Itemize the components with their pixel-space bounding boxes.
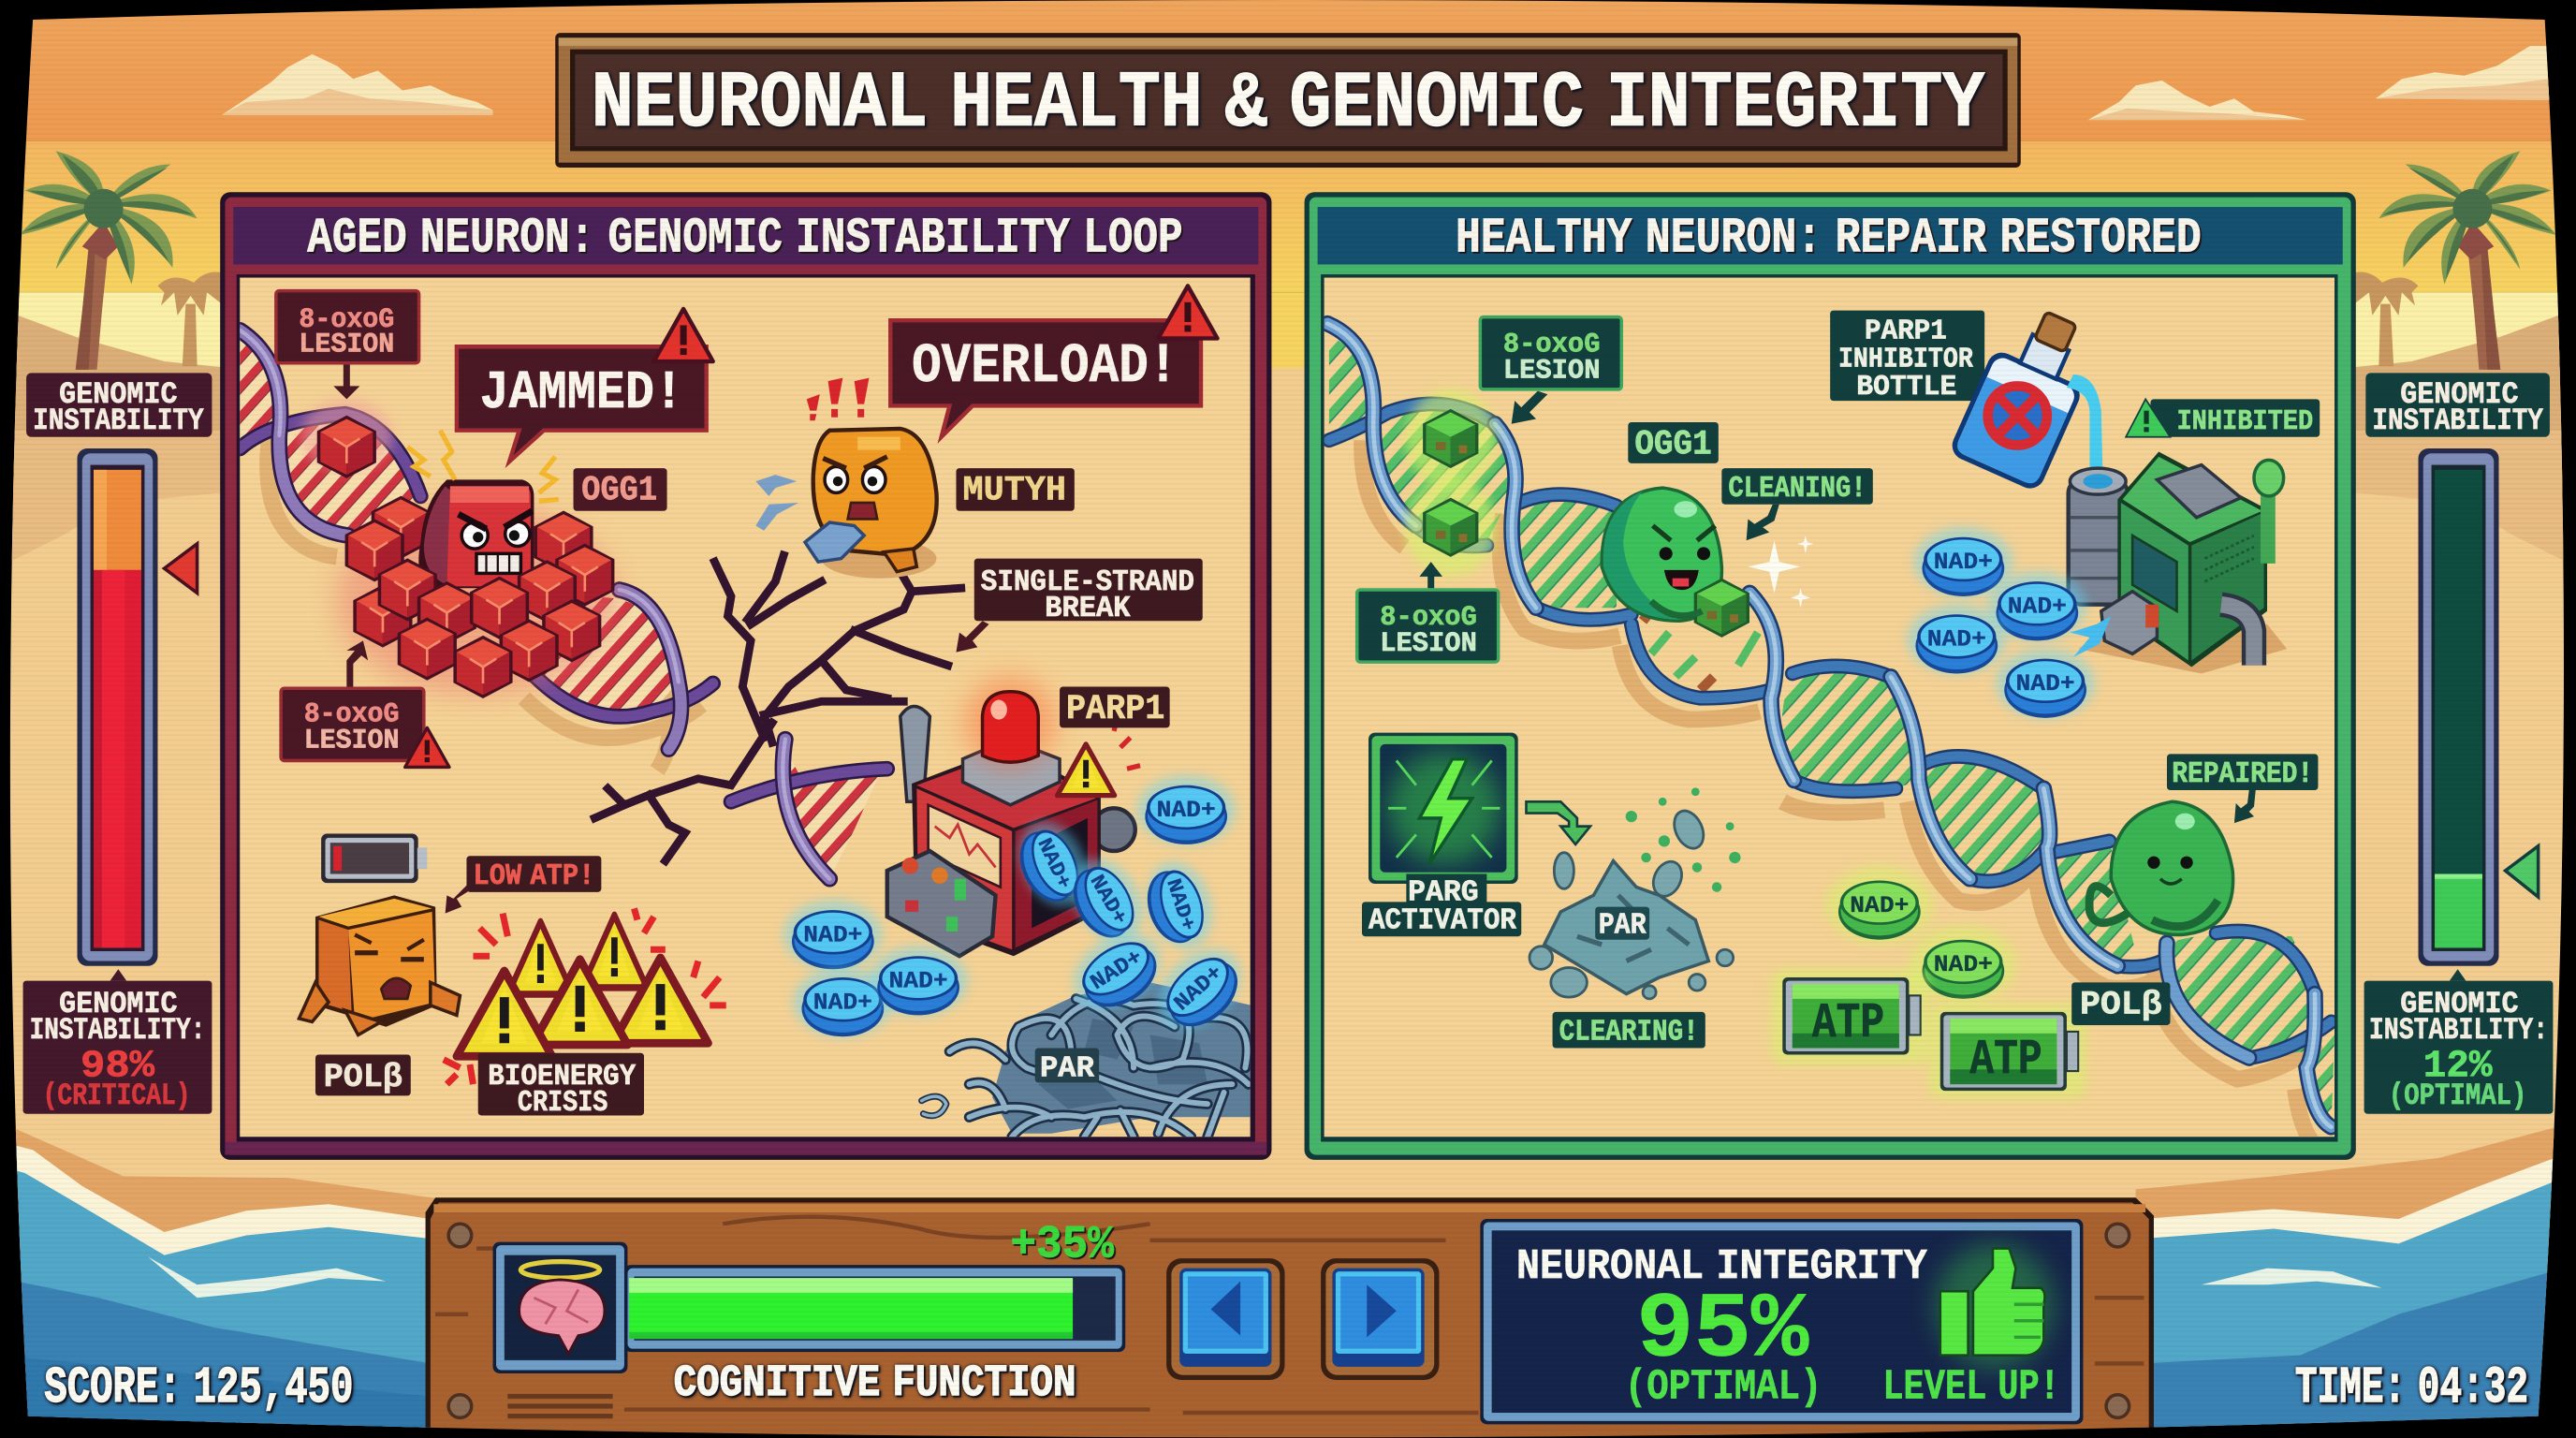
nad+ coins aged: NAD+ bbox=[803, 923, 862, 948]
bubble: jammed: JAMMED! bbox=[479, 363, 683, 424]
arrow: lesion up bbox=[346, 640, 368, 686]
label: parp1 inhibitor bottle bbox=[1830, 311, 1984, 404]
broken rungs bbox=[1651, 633, 1758, 677]
label: ogg1: OGG1 bbox=[581, 471, 657, 510]
machine wrench bbox=[900, 707, 929, 801]
panel heading: AGED NEURON: GENOMIC INSTABILITY LOOP bbox=[307, 210, 1183, 266]
green lesion cubes bbox=[1405, 389, 1497, 577]
label: 8-oxoG lesion top: 8-oxoG bbox=[1503, 329, 1600, 360]
blue splash bbox=[2070, 616, 2111, 657]
label: 8-oxoG lesion top: LESION bbox=[1503, 355, 1600, 387]
ocean right bbox=[2142, 1159, 2554, 1428]
nad+ coins aged: NAD+ bbox=[1161, 876, 1200, 934]
nad+ coins aged: NAD+ bbox=[813, 990, 872, 1016]
label: 8-oxoG lesion bottom: LESION bbox=[1380, 627, 1477, 659]
label: par: PAR bbox=[1599, 910, 1647, 943]
machine body bbox=[912, 746, 1101, 956]
dna helix repaired bbox=[1327, 324, 2334, 1149]
cognitive function bar bbox=[624, 1265, 1125, 1352]
gauge readout: INSTABILITY: bbox=[30, 1013, 205, 1048]
pile of stuck cubes back bbox=[337, 498, 616, 695]
label: clearing: CLEARING! bbox=[1559, 1017, 1699, 1049]
display value: 95% bbox=[1636, 1279, 1809, 1384]
label: 8-oxoG lesion lower: LESION bbox=[304, 724, 399, 756]
panel illustration bbox=[1327, 299, 2334, 1149]
nad+ coins green: NAD+ bbox=[1934, 953, 1993, 978]
title text: NEURONAL HEALTH & GENOMIC INTEGRITY bbox=[592, 60, 1985, 149]
cloud right bbox=[2088, 81, 2306, 120]
bubble: jammed bbox=[457, 309, 713, 462]
label: 8-oxoG lesion lower: 8-oxoG bbox=[304, 697, 399, 729]
character: overloaded mutyh bbox=[805, 429, 937, 579]
label: 8-oxoG lesion bottom: 8-oxoG bbox=[1380, 601, 1477, 633]
gauge label: GENOMIC bbox=[2400, 377, 2519, 412]
gauge label bbox=[26, 373, 212, 438]
gauge label: INSTABILITY bbox=[2372, 404, 2543, 438]
label: inhibited: INHIBITED bbox=[2177, 405, 2313, 438]
button: next bbox=[1321, 1258, 1439, 1380]
gauge readout bbox=[2364, 969, 2553, 1114]
panel heading: HEALTHY NEURON: REPAIR RESTORED bbox=[1456, 210, 2202, 266]
sparkles bbox=[1748, 536, 1814, 608]
helix rungs bbox=[1329, 337, 2334, 1127]
nad+ coins green bbox=[1825, 866, 2017, 1004]
character: polb happy bbox=[2089, 801, 2233, 934]
sparks around ogg1 bbox=[407, 431, 559, 501]
label: cognitive function: COGNITIVE FUNCTION bbox=[674, 1359, 1076, 1409]
machine nozzle bbox=[2101, 592, 2157, 653]
label: parg activator: ACTIVATOR bbox=[1368, 904, 1516, 937]
nad+ coins aged bbox=[783, 775, 1256, 1045]
machine siren bbox=[964, 677, 1057, 769]
machine console bbox=[887, 851, 996, 956]
wooden control console bbox=[426, 1197, 2154, 1438]
gauge readout: GENOMIC bbox=[2400, 987, 2519, 1021]
warning on overload bubble bbox=[1158, 286, 1218, 338]
palm trees left bbox=[20, 151, 222, 370]
machine screen bbox=[929, 805, 1001, 888]
label: 8-oxoG lesion top bbox=[1480, 317, 1621, 389]
cloud left bbox=[222, 54, 493, 115]
cloud far right bbox=[2376, 46, 2550, 100]
character: exhausted polb bbox=[299, 895, 460, 1034]
cracks: single-strand break bbox=[594, 555, 961, 860]
helix shadow bbox=[1362, 440, 2320, 1149]
gauge readout: GENOMIC bbox=[59, 987, 178, 1021]
water stream bbox=[2067, 374, 2103, 481]
label: parp1 inhibitor bottle: INHIBITOR bbox=[1838, 343, 1973, 375]
label: par: PAR bbox=[1040, 1052, 1094, 1085]
icon: atp battery two bbox=[1928, 1004, 2086, 1099]
warning on jammed bubble bbox=[654, 309, 713, 361]
machine warning bbox=[1058, 744, 1115, 796]
parp1 machine inhibited bbox=[2069, 452, 2287, 673]
label: parg activator bbox=[1362, 874, 1521, 937]
panel: aged neuron bbox=[220, 192, 1271, 1160]
tangled par pile bbox=[922, 982, 1251, 1137]
bubble: overload: OVERLOAD! bbox=[912, 334, 1178, 398]
nad+ coins aged: NAD+ bbox=[1157, 799, 1216, 824]
dust puffs bbox=[755, 475, 798, 531]
crumbling par pile bbox=[1530, 787, 1741, 999]
label: ogg1: OGG1 bbox=[1634, 425, 1712, 464]
icon: atp battery one bbox=[1771, 969, 1928, 1064]
machine pipe bbox=[2221, 605, 2254, 666]
label: parp1 inhibitor bottle: BOTTLE bbox=[1856, 371, 1956, 404]
label: parp1: PARP1 bbox=[1066, 690, 1164, 729]
label: parg activator: PARG bbox=[1408, 877, 1479, 910]
icon: atp battery two: ATP bbox=[1969, 1032, 2042, 1088]
icon: parg activator bbox=[1368, 733, 1518, 884]
warning signs: bioenergy crisis bbox=[457, 915, 708, 1056]
machine body bbox=[2117, 452, 2267, 667]
exclamation marks bbox=[807, 378, 869, 420]
left gauge: genomic instability 98% bbox=[23, 373, 212, 1114]
panel: healthy neuron bbox=[1305, 192, 2356, 1160]
bubble: overload bbox=[890, 286, 1218, 437]
nad+ coins healthy: NAD+ bbox=[1927, 628, 1986, 653]
wood base bbox=[426, 1197, 2154, 1438]
gauge pointer bbox=[2506, 846, 2539, 897]
machine screen bbox=[2132, 536, 2177, 611]
machine dark opening bbox=[1032, 818, 1088, 928]
label: +35%: +35% bbox=[1010, 1218, 1114, 1270]
icon: inhibitor bottle bbox=[1948, 299, 2106, 493]
gauge readout: 12% bbox=[2423, 1045, 2493, 1088]
gauge label: INSTABILITY bbox=[33, 404, 204, 438]
label: 8-oxoG lesion top bbox=[276, 291, 419, 363]
gauge pointer bbox=[165, 544, 198, 593]
icon: thumbs up bbox=[1936, 1243, 2054, 1369]
label: polb: POLβ bbox=[324, 1059, 402, 1096]
warning small bbox=[405, 727, 449, 767]
nad+ coins healthy: NAD+ bbox=[2016, 672, 2075, 697]
label: 8-oxoG lesion top: LESION bbox=[299, 329, 394, 360]
machine cylinder bbox=[2069, 468, 2128, 605]
neuronal integrity display bbox=[1480, 1219, 2083, 1424]
red lesion cube on dna bbox=[300, 399, 392, 477]
dna helix damaged bbox=[228, 330, 887, 879]
icon: brain with halo bbox=[493, 1242, 627, 1373]
character: ogg1 cleaning bbox=[1602, 488, 1748, 636]
pile of stuck cubes front bbox=[355, 560, 600, 697]
character: jammed ogg1 bbox=[418, 479, 534, 588]
label: polb: POLβ bbox=[2080, 987, 2162, 1024]
arrow: lesion top bbox=[1512, 391, 1547, 424]
display heading: NEURONAL INTEGRITY bbox=[1516, 1242, 1927, 1291]
panel frame bbox=[1305, 192, 2356, 1160]
label: repaired: REPAIRED! bbox=[2172, 758, 2313, 791]
gauge readout: (OPTIMAL) bbox=[2389, 1078, 2526, 1113]
arrow: parg to par bbox=[1526, 801, 1590, 844]
arrow: low atp bbox=[446, 886, 470, 914]
label: single-strand break: SINGLE-STRAND bbox=[981, 566, 1194, 599]
nad+ coins aged: NAD+ bbox=[1032, 835, 1076, 893]
nad+ coins healthy: NAD+ bbox=[2008, 595, 2067, 621]
nad+ coins healthy bbox=[1908, 527, 2095, 718]
nad+ coins aged: NAD+ bbox=[1085, 871, 1132, 929]
ocean left bbox=[0, 1142, 431, 1438]
right gauge: genomic instability 12% bbox=[2364, 373, 2553, 1114]
nad+ coins aged: NAD+ bbox=[889, 970, 948, 995]
label: 8-oxoG lesion top: 8-oxoG bbox=[299, 303, 394, 335]
nad+ coins aged: NAD+ bbox=[1170, 961, 1228, 1017]
title plaque bbox=[555, 33, 2021, 168]
parp1 machine overloaded bbox=[887, 677, 1140, 956]
arrow: lesion bottom bbox=[1419, 562, 1442, 588]
machine siren base bbox=[962, 740, 1060, 805]
label: bioenergy crisis: BIOENERGY bbox=[488, 1061, 636, 1093]
helix front strands bbox=[1327, 324, 2331, 1127]
label: single-strand break bbox=[974, 559, 1203, 625]
label: bioenergy crisis bbox=[478, 1053, 644, 1120]
warning sparks bbox=[444, 908, 726, 1084]
machine gears bbox=[1092, 808, 1135, 851]
label: 8-oxoG lesion bottom bbox=[1357, 590, 1499, 662]
arrow: break bbox=[956, 621, 989, 653]
panel illustration bbox=[228, 286, 1256, 1137]
gauge readout bbox=[23, 969, 212, 1114]
machine antenna bbox=[2261, 473, 2276, 564]
label: cleaning: CLEANING! bbox=[1728, 473, 1866, 506]
label: inhibited bbox=[2126, 399, 2320, 438]
gauge tube bbox=[2419, 448, 2499, 966]
vent lines bbox=[507, 1397, 613, 1416]
display status: (OPTIMAL) bbox=[1625, 1362, 1822, 1411]
gauge readout: 98% bbox=[80, 1045, 155, 1088]
button: previous bbox=[1166, 1258, 1284, 1380]
gauge readout: (CRITICAL) bbox=[43, 1078, 191, 1113]
nad+ coins healthy: NAD+ bbox=[1934, 550, 1993, 576]
arrow: repaired bbox=[2234, 790, 2256, 823]
icon: low battery bbox=[322, 834, 427, 882]
label: bioenergy crisis: CRISIS bbox=[518, 1087, 607, 1120]
gauge tube bbox=[77, 448, 157, 966]
gauge label bbox=[2365, 373, 2550, 438]
machine top plate bbox=[2157, 465, 2241, 518]
label: parp1 inhibitor bottle: PARP1 bbox=[1865, 315, 1947, 347]
arrow: cleaning bbox=[1747, 505, 1779, 540]
bolts bbox=[448, 1224, 2130, 1417]
display level up: LEVEL UP! bbox=[1882, 1362, 2060, 1411]
machine vents bbox=[2204, 536, 2254, 581]
palm trees right bbox=[2354, 151, 2556, 370]
nad+ coins aged: NAD+ bbox=[1087, 946, 1148, 996]
helix back strands bbox=[1329, 404, 2331, 1058]
icon: atp battery one: ATP bbox=[1812, 995, 1884, 1051]
label: 8-oxoG lesion lower bbox=[281, 688, 424, 760]
label: mutyh: MUTYH bbox=[962, 471, 1066, 510]
nad+ coins green: NAD+ bbox=[1850, 894, 1909, 919]
gauge label: GENOMIC bbox=[59, 377, 178, 412]
arrow: lesion down bbox=[333, 365, 359, 399]
label: single-strand break: BREAK bbox=[1045, 593, 1131, 625]
label: low atp: LOW ATP! bbox=[473, 860, 594, 893]
panel frame bbox=[220, 192, 1271, 1160]
score readout: SCORE: 125,450 bbox=[44, 1360, 353, 1417]
